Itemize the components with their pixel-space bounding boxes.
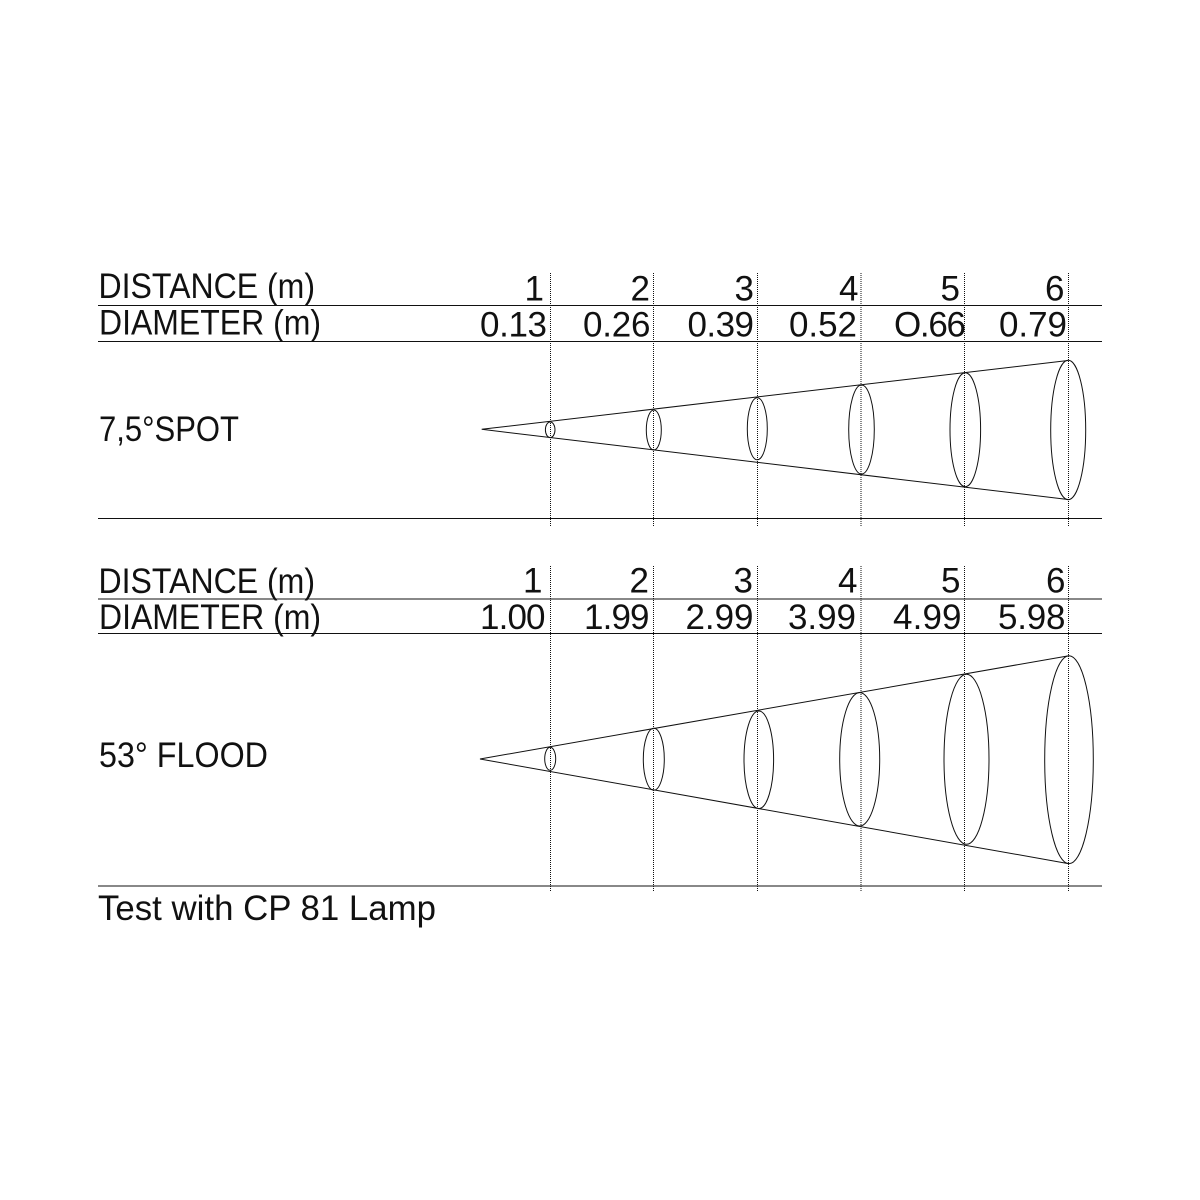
label: spot: 7,5°SPOT — [99, 410, 239, 449]
table header: spot diameter row: 0.79 — [999, 306, 1067, 344]
footnote: Test with CP 81 Lamp — [98, 889, 436, 928]
table header: flood diameter row: 1.00 — [480, 598, 546, 637]
table header: spot distance row: 6 — [1045, 270, 1064, 308]
table header: flood distance row: 1 — [523, 562, 542, 600]
table header: flood diameter row: 2.99 — [686, 598, 754, 637]
table header: spot distance row: 1 — [525, 270, 544, 308]
table header: spot distance row: 2 — [631, 270, 650, 308]
table header: spot diameter row: DIAMETER (m) — [99, 304, 321, 342]
table header: spot distance row: 4 — [839, 270, 858, 308]
table header: flood distance row: 2 — [630, 562, 649, 600]
table header: spot diameter row: 0.26 — [583, 306, 650, 344]
table header: flood diameter row: 3.99 — [788, 598, 856, 637]
table header: flood diameter row: 5.98 — [998, 598, 1066, 637]
table header: flood distance row: 4 — [838, 562, 858, 600]
table header: spot distance row: 5 — [941, 270, 960, 308]
table header: spot diameter row: 0.39 — [688, 306, 754, 344]
diagram: flood beam cone — [480, 656, 1093, 864]
diagram: spot beam cone — [482, 360, 1086, 500]
table header: flood distance row — [98, 562, 1066, 601]
table header: flood distance row: DISTANCE (m) — [98, 562, 315, 601]
table header: flood distance row: 6 — [1046, 562, 1066, 600]
table header: spot distance row: DISTANCE (m) — [98, 267, 315, 306]
table header: flood diameter row — [99, 598, 1066, 637]
table header: spot diameter row: 0.52 — [789, 306, 857, 344]
table header: spot diameter row: 0.13 — [480, 306, 547, 344]
table header: spot distance row — [98, 267, 1064, 308]
table header: flood diameter row: 4.99 — [893, 598, 962, 637]
table header: flood distance row: 5 — [941, 562, 960, 600]
label: flood: 53° FLOOD — [99, 736, 268, 775]
table header: flood diameter row: DIAMETER (m) — [99, 598, 321, 637]
table header: spot distance row: 3 — [735, 270, 754, 308]
table header: spot diameter row — [99, 304, 1067, 344]
table header: flood distance row: 3 — [734, 562, 753, 600]
table header: spot diameter row: O.66 — [894, 306, 966, 344]
table header: flood diameter row: 1.99 — [584, 598, 650, 637]
